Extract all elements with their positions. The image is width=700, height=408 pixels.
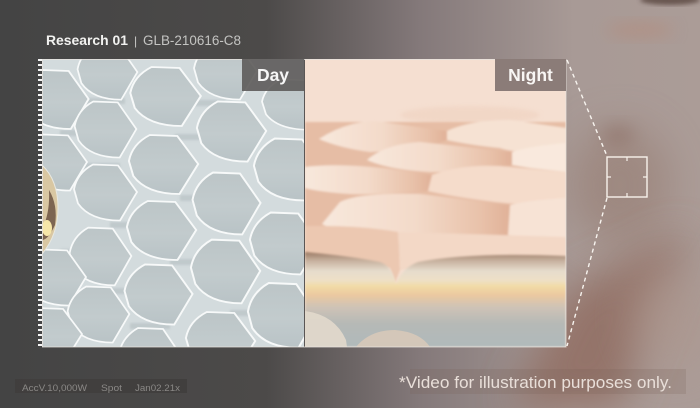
- label: Day: [242, 59, 304, 91]
- icon: focus square: [607, 157, 647, 197]
- footnote: *Video for illustration purposes only.: [399, 374, 672, 392]
- heading: research id: GLB-210616-C8: [143, 33, 241, 48]
- heading: research id: |: [134, 34, 137, 48]
- bubbles: [305, 311, 347, 347]
- footnote: [399, 369, 686, 394]
- heading: research id: Research 01: [46, 33, 129, 48]
- heading: research id: [46, 33, 241, 48]
- hex cells: [76, 59, 138, 100]
- label: Night: Night: [508, 65, 553, 85]
- meta strip: Jan02.21x: [135, 383, 180, 394]
- cream underside bands: [305, 252, 566, 347]
- meta strip: AccV.10,000W: [22, 383, 87, 394]
- droplet: [42, 165, 58, 254]
- panel: night cream texture: [305, 59, 566, 347]
- panel frame: [42, 60, 566, 347]
- label: Day: Day: [257, 65, 289, 85]
- meta strip: Spot: [101, 383, 122, 394]
- cream petals: [305, 120, 566, 283]
- panel: day hexagon texture: [42, 59, 304, 347]
- scale ticks: [38, 59, 42, 347]
- label: Night: [495, 59, 566, 91]
- zoom callout lines: [567, 60, 607, 346]
- meta strip: [15, 379, 187, 394]
